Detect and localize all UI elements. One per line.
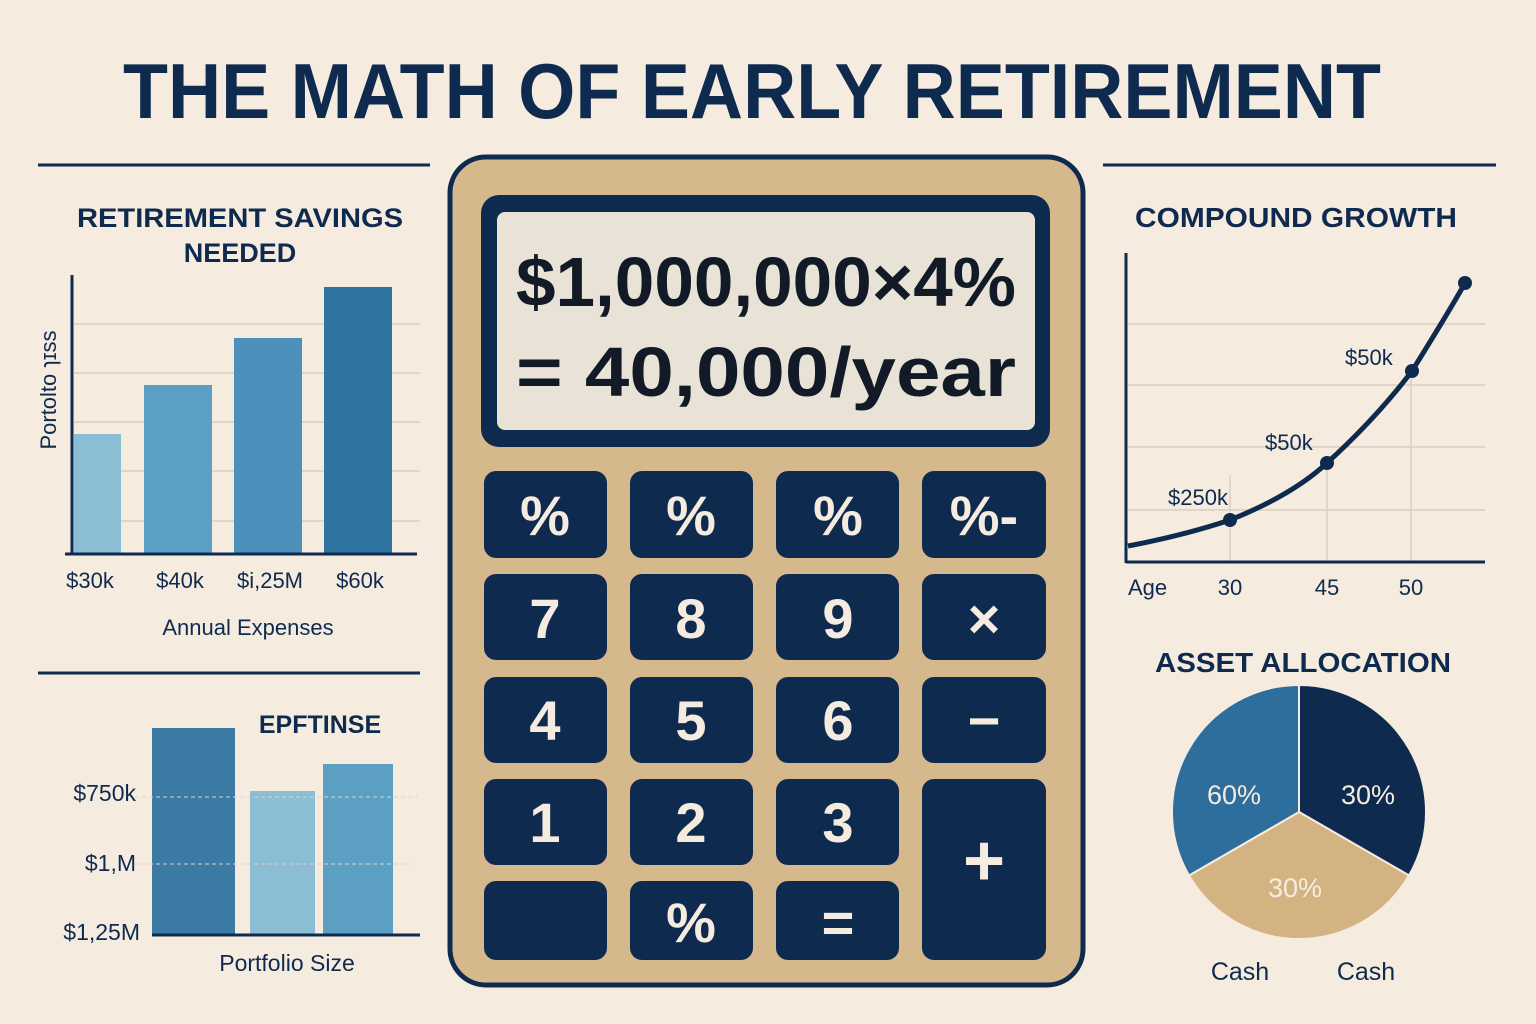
display: = 40,000/year <box>516 333 1016 411</box>
calculator: 6 <box>822 689 854 752</box>
panel: asset allocation: 30% <box>1341 780 1395 810</box>
axis labels: Portolto ɿɪss <box>36 330 61 450</box>
bar chart: savings bars <box>74 287 392 554</box>
heading: retirement savings needed <box>77 203 403 268</box>
axis labels: $30k <box>66 568 115 593</box>
panel: asset allocation: 30% <box>1268 873 1322 903</box>
axis labels: $60k <box>336 568 385 593</box>
calculator: 5 <box>675 689 707 752</box>
panel: asset allocation: Cash <box>1211 958 1269 986</box>
calculator: 1 <box>529 791 561 854</box>
calculator: 7 <box>529 587 561 650</box>
panel: asset allocation <box>1155 647 1451 986</box>
calculator: %- <box>950 484 1018 547</box>
panel: compound growth: $250k <box>1168 485 1229 510</box>
calculator: % <box>666 484 716 547</box>
panel: compound growth: Age <box>1128 575 1167 600</box>
display: $1,000,000×4% <box>516 243 1016 321</box>
calculator: % <box>666 891 716 954</box>
calculator: 8 <box>675 587 707 650</box>
calculator: % <box>520 484 570 547</box>
heading: compound growth: COMPOUND GROWTH <box>1135 202 1457 233</box>
panel: compound growth: 30 <box>1218 575 1242 600</box>
calculator: 3 <box>822 791 854 854</box>
axis labels: Annual Expenses <box>162 615 334 640</box>
bar chart: portfolio bars <box>152 728 393 935</box>
calculator: % <box>813 484 863 547</box>
x label: Portfolio Size <box>219 950 355 976</box>
heading: retirement savings needed: NEEDED <box>184 238 296 268</box>
calculator: + <box>963 821 1005 901</box>
y labels: $750k <box>73 780 136 806</box>
calculator: − <box>968 689 1000 752</box>
calculator <box>450 157 1083 985</box>
axis labels <box>36 330 385 640</box>
calculator: 9 <box>822 587 854 650</box>
axis labels: $i,25M <box>237 568 303 593</box>
panel: retirement savings needed <box>36 165 430 640</box>
y labels: $1,25M <box>63 919 140 945</box>
heading: epftinse: EPFTINSE <box>259 711 381 739</box>
panel: compound growth: 45 <box>1315 575 1339 600</box>
line chart: growth curve <box>1128 276 1472 546</box>
pie chart <box>1172 685 1426 939</box>
heading: asset allocation: ASSET ALLOCATION <box>1155 647 1451 678</box>
panel: compound growth: $50k <box>1345 345 1394 370</box>
panel: compound growth: $50k <box>1265 430 1314 455</box>
y labels <box>63 780 140 945</box>
calculator: 4 <box>529 689 561 752</box>
panel: compound growth: 50 <box>1399 575 1423 600</box>
y labels: $1,M <box>85 850 136 876</box>
panel: portfolio size <box>38 673 420 976</box>
title: THE MATH OF EARLY RETIREMENT <box>123 47 1381 135</box>
calculator: × <box>968 587 1000 650</box>
axis labels: $40k <box>156 568 205 593</box>
display <box>481 195 1050 447</box>
heading: retirement savings needed: RETIREMENT SAVINGS <box>77 203 403 233</box>
panel: compound growth <box>1103 165 1496 600</box>
panel: asset allocation: Cash <box>1337 958 1395 986</box>
panel: asset allocation: 60% <box>1207 780 1261 810</box>
calculator: 2 <box>675 791 707 854</box>
calculator: = <box>822 891 854 954</box>
keypad <box>484 471 1046 960</box>
